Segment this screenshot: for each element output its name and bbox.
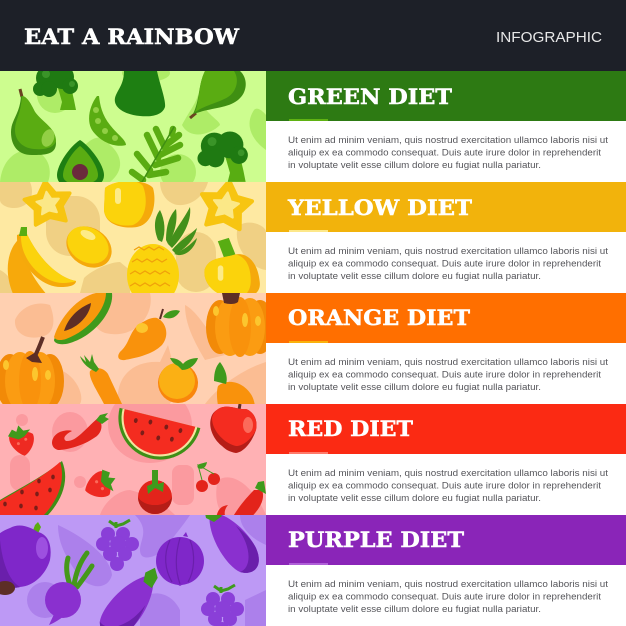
- panel: yellow diet: [266, 182, 626, 282]
- panel: green diet: [266, 71, 626, 171]
- icon: star fruit left: [22, 178, 73, 226]
- icon: broccoli right: [197, 131, 248, 182]
- icon: lemon: [66, 226, 112, 268]
- text block: in voluptate velit esse cillum dolore eu fugiat nulla pariatur.: [288, 493, 541, 504]
- icon: chili top: [52, 413, 109, 450]
- text block: Ut enim ad minim veniam, quis nostrud exercitation ullamco laboris nisi ut: [288, 246, 608, 257]
- icon: strawberry lower: [85, 470, 116, 498]
- heading: PURPLE DIET: [288, 527, 464, 552]
- icon: eggplant top: [205, 515, 259, 573]
- text block: aliquip ex ea commodo consequat. Duis aute irure dolor in reprehenderit: [288, 258, 601, 270]
- text block: aliquip ex ea commodo consequat. Duis aute irure dolor in reprehenderit: [288, 370, 601, 380]
- heading: RED DIET: [288, 416, 413, 441]
- icon: mango: [118, 309, 180, 360]
- panel: red diet: [266, 404, 626, 504]
- icon: grapes top: [96, 520, 139, 571]
- icon: broccoli top: [33, 71, 78, 110]
- text block: aliquip ex ea commodo consequat. Duis aute irure dolor in reprehenderit: [288, 592, 601, 602]
- heading: YELLOW DIET: [287, 195, 472, 220]
- panel: orange produce: [0, 293, 266, 404]
- text block: Ut enim ad minim veniam, quis nostrud exercitation ullamco laboris nisi ut: [288, 135, 608, 146]
- panel: green produce: [0, 71, 266, 182]
- text block: aliquip ex ea commodo consequat. Duis aute irure dolor in reprehenderit: [288, 480, 601, 492]
- icon: cherries: [196, 462, 220, 492]
- icon: papaya: [54, 293, 112, 344]
- icon: tomato: [138, 470, 172, 514]
- subtitle: INFOGRAPHIC: [496, 30, 602, 46]
- icon: strawberry left: [8, 426, 34, 456]
- icon: chili lower: [216, 481, 266, 515]
- icon: leaf: [132, 127, 180, 182]
- text block: in voluptate velit esse cillum dolore eu fugiat nulla pariatur.: [288, 604, 541, 615]
- text block: Ut enim ad minim veniam, quis nostrud exercitation ullamco laboris nisi ut: [288, 579, 608, 590]
- icon: eggplant lower: [89, 568, 170, 626]
- icon: onion: [156, 532, 204, 586]
- text block: Ut enim ad minim veniam, quis nostrud exercitation ullamco laboris nisi ut: [288, 468, 608, 479]
- icon: pumpkin left: [0, 337, 64, 411]
- heading: GREEN DIET: [288, 84, 452, 109]
- icon: pumpkin right: [206, 293, 266, 357]
- heading: ORANGE DIET: [288, 305, 470, 330]
- text block: in voluptate velit esse cillum dolore eu fugiat nulla pariatur.: [288, 160, 541, 171]
- icon: carrot: [80, 354, 122, 404]
- icon: banana: [8, 227, 76, 296]
- icon: star fruit right: [198, 178, 254, 230]
- icon: mango lower: [214, 362, 255, 404]
- panel: orange diet: [266, 293, 626, 393]
- text block: [288, 246, 608, 282]
- title: EAT A RAINBOW: [24, 24, 239, 49]
- icon: tangerine: [158, 358, 198, 403]
- icon: pear left: [11, 89, 57, 155]
- text block: [288, 357, 608, 393]
- icon: beet: [45, 553, 92, 625]
- icon: watermelon lower: [0, 461, 65, 515]
- icon: apple: [210, 404, 257, 453]
- text block: in voluptate velit esse cillum dolore eu fugiat nulla pariatur.: [288, 271, 541, 282]
- icon: grapes lower: [201, 585, 244, 626]
- text block: in voluptate velit esse cillum dolore eu fugiat nulla pariatur.: [288, 382, 541, 393]
- icon: pineapple: [127, 207, 197, 293]
- icon: avocado top: [115, 71, 165, 116]
- icon: yellow pepper top: [104, 181, 154, 228]
- text block: [288, 468, 608, 504]
- text block: [288, 135, 608, 171]
- icon: pear right: [190, 71, 246, 118]
- panel: purple produce: [0, 508, 266, 626]
- text block: [288, 579, 608, 615]
- icon: avocado: [57, 140, 104, 182]
- icon: yellow pepper right: [204, 238, 260, 298]
- icon: purple pepper: [0, 522, 51, 595]
- panel: red produce: [0, 404, 266, 515]
- text block: Ut enim ad minim veniam, quis nostrud exercitation ullamco laboris nisi ut: [288, 357, 608, 368]
- panel: yellow produce: [0, 182, 266, 293]
- text block: aliquip ex ea commodo consequat. Duis aute irure dolor in reprehenderit: [288, 148, 601, 158]
- panel: purple diet: [266, 515, 626, 615]
- icon: pea pod: [89, 96, 126, 146]
- header bar: [0, 0, 626, 71]
- icon: watermelon top: [118, 408, 200, 460]
